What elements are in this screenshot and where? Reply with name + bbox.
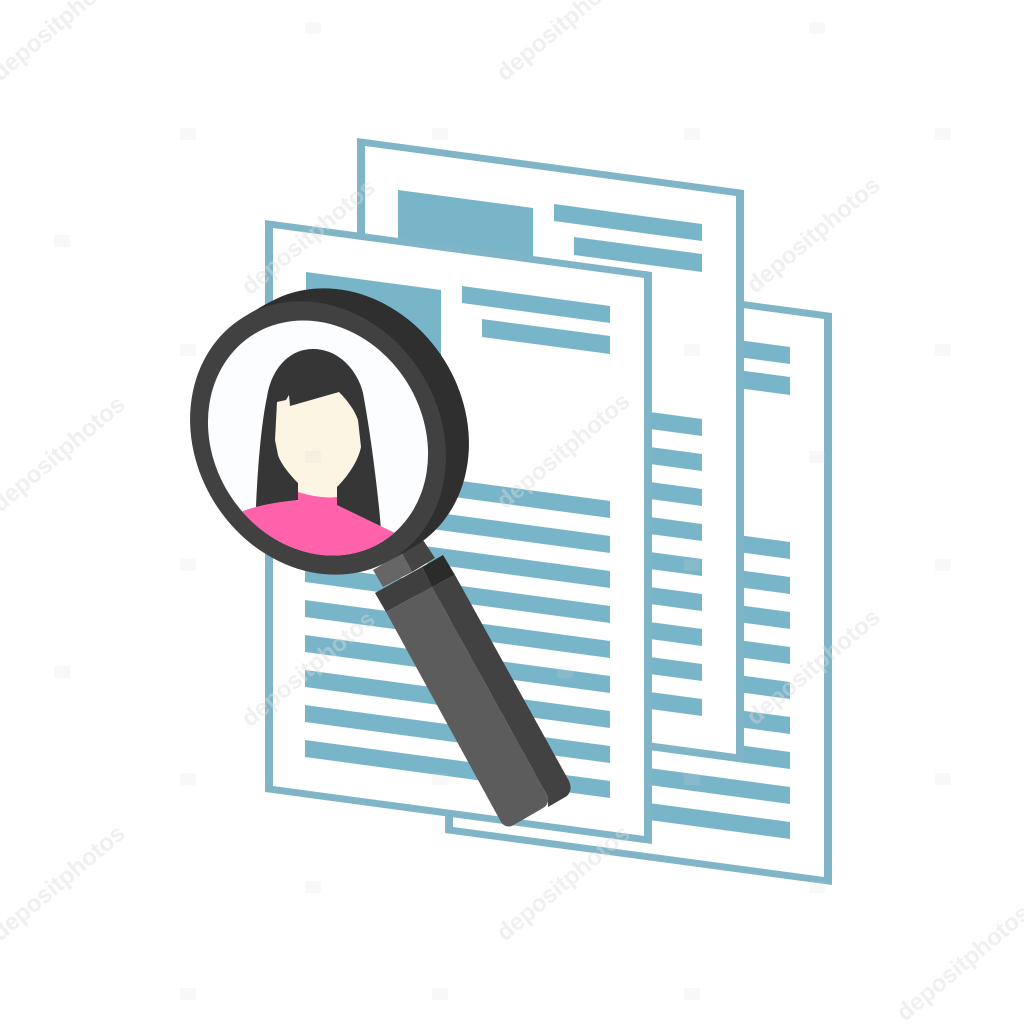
document: front page bbox=[265, 220, 652, 844]
hair bbox=[256, 349, 381, 530]
watermark: depositphotos bbox=[237, 174, 381, 301]
portrait: woman bbox=[242, 349, 394, 556]
watermark: depositphotos bbox=[492, 820, 636, 947]
magnifier handle bbox=[373, 540, 571, 826]
lens bbox=[164, 279, 472, 597]
watermark: depositphotos bbox=[492, 388, 636, 515]
watermark: depositphotos bbox=[742, 604, 886, 731]
document: back page bbox=[445, 261, 832, 885]
watermark: depositphotos bbox=[237, 606, 381, 733]
magnifier rim bbox=[139, 253, 497, 623]
face and neck bbox=[275, 392, 361, 505]
magnifying glass bbox=[139, 240, 571, 827]
magnifier rim depth bbox=[144, 240, 520, 620]
watermark: depositphotos bbox=[742, 172, 886, 299]
document: middle page bbox=[357, 138, 744, 762]
pink top bbox=[242, 492, 394, 556]
